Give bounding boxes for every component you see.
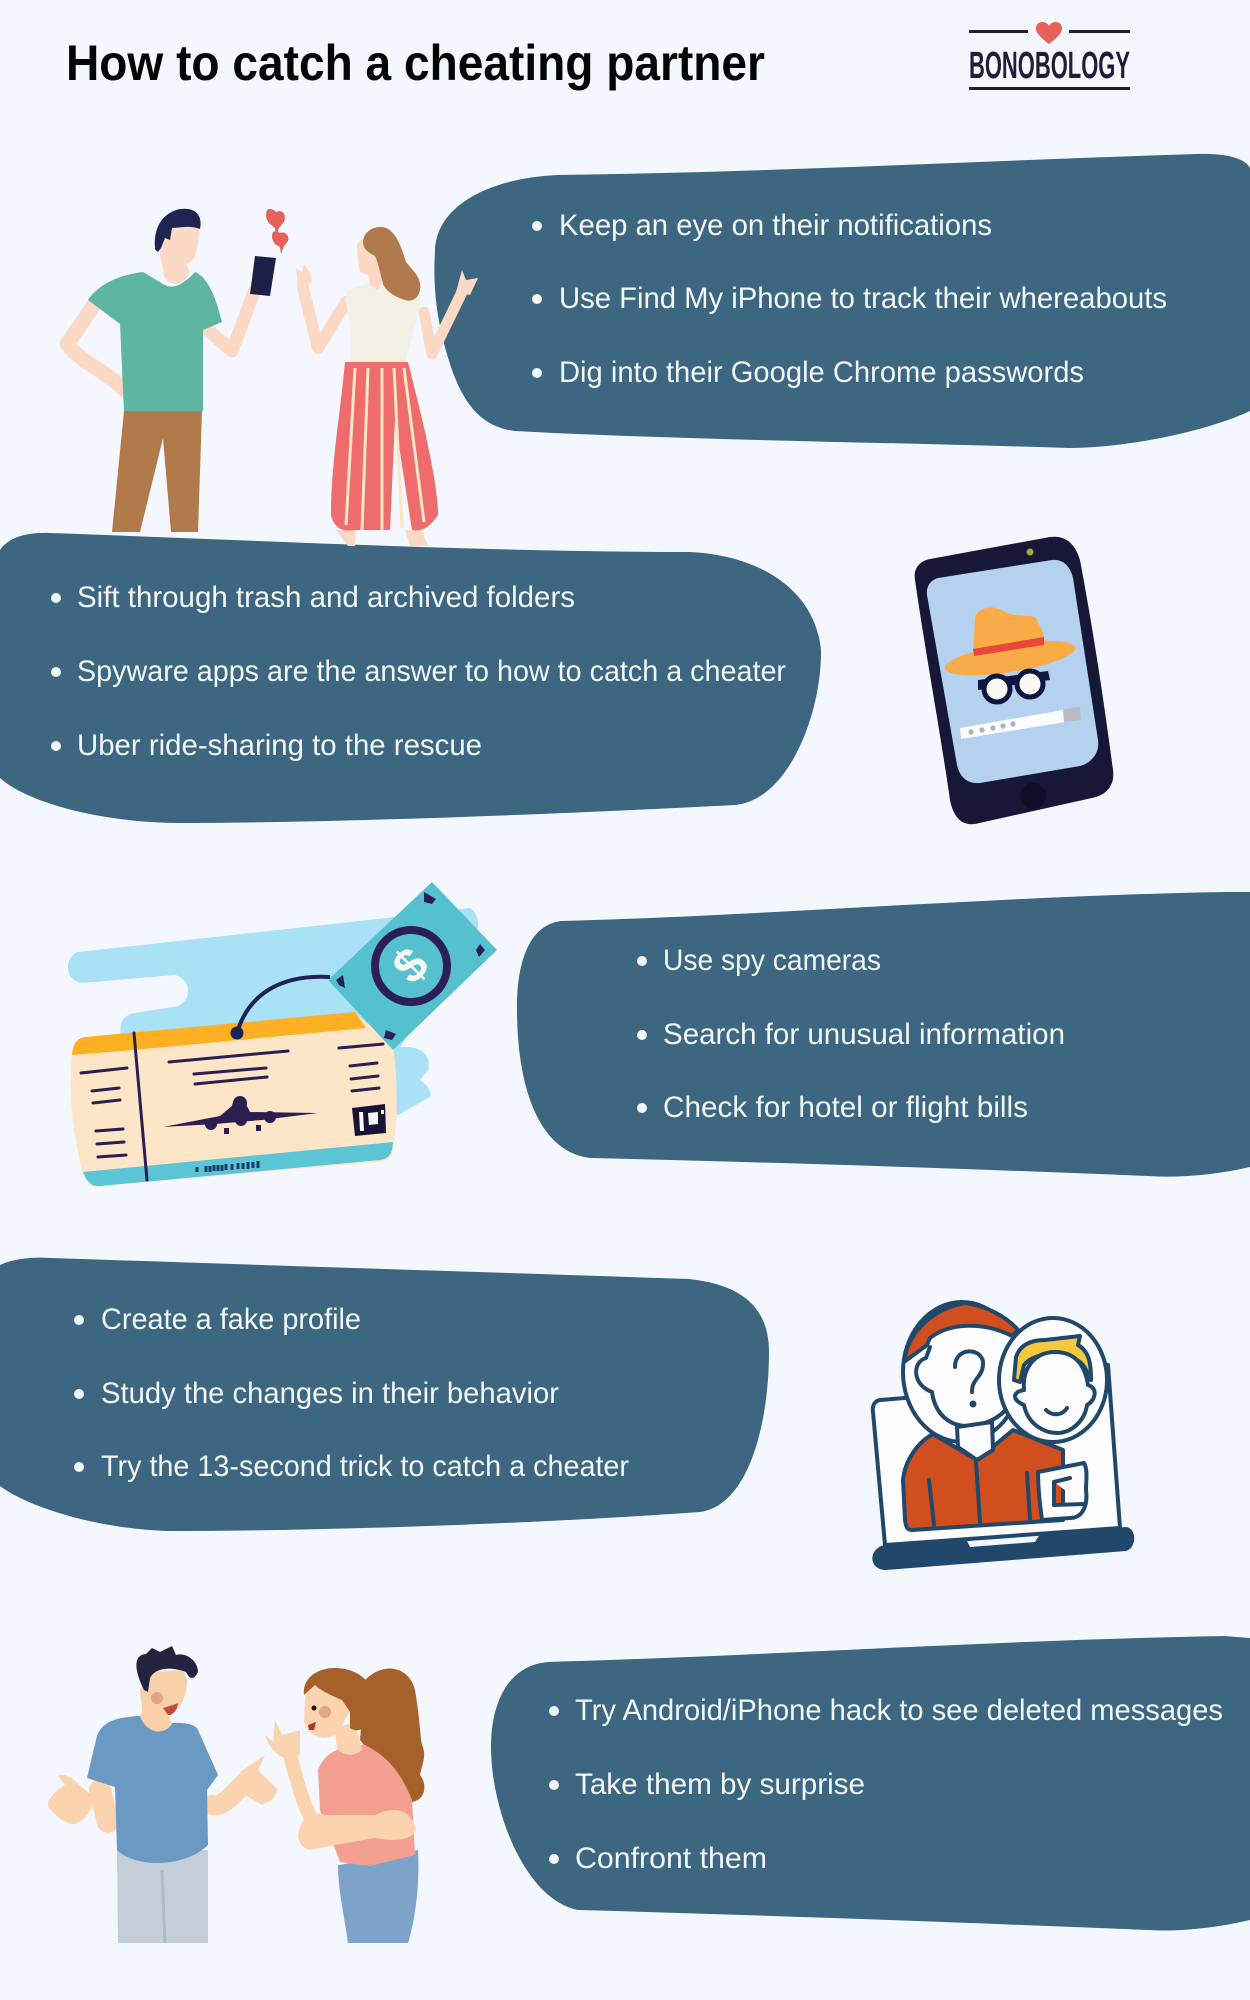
- woman gesturing: [296, 227, 478, 546]
- panel: surprise and confront tips: [491, 1636, 1250, 1931]
- banknote: [328, 882, 497, 1050]
- panel: notifications tips: Dig into their Google Chrome passwords: [559, 356, 1084, 389]
- ticket body: [70, 1013, 397, 1186]
- panel: fake profile tips: Create a fake profile: [101, 1303, 361, 1336]
- panel: notifications tips: Use Find My iPhone to track their whereabouts: [559, 282, 1167, 315]
- panel: trash and spyware tips: Spyware apps are the answer to how to catch a cheater: [77, 655, 786, 688]
- illustration: phone with spy hat: [915, 537, 1113, 824]
- barcode: [197, 1161, 258, 1172]
- panel: surprise and confront tips: Confront them: [575, 1842, 767, 1875]
- logo: Bonobology: BONOBOLOGY: [969, 45, 1130, 87]
- cloud shape: [68, 908, 478, 1115]
- panel: notifications tips: [434, 154, 1250, 448]
- hidden face with question mark: [903, 1302, 1021, 1442]
- panel: spy camera tips: Use spy cameras: [663, 944, 881, 977]
- phone screen: [927, 560, 1098, 783]
- panel: spy camera tips: Check for hotel or flight bills: [663, 1091, 1028, 1124]
- connecting string: [237, 977, 330, 1033]
- illustration: flight ticket and money: $: [383, 938, 439, 994]
- QR code: [352, 1104, 386, 1136]
- illustration: arguing couple: [48, 1646, 424, 1943]
- person body: [903, 1430, 1063, 1530]
- panel: fake profile tips: Study the changes in their behavior: [101, 1377, 559, 1410]
- phone body: [915, 537, 1113, 824]
- ticket teal band: [83, 1142, 393, 1186]
- glasses: [978, 671, 1050, 702]
- arguing woman: [265, 1668, 424, 1943]
- panel: spy camera tips: [517, 892, 1250, 1177]
- panel: notifications tips: Keep an eye on their notifications: [559, 209, 992, 242]
- spy hat: [943, 608, 1077, 682]
- smiling mask: [999, 1318, 1107, 1442]
- logo: Bonobology: [969, 22, 1130, 90]
- panel: surprise and confront tips: Try Android/iPhone hack to see deleted messages: [575, 1694, 1223, 1727]
- hand holding mask: [1038, 1463, 1086, 1520]
- laptop screen: [873, 1365, 1120, 1545]
- panel: fake profile tips: [0, 1258, 769, 1531]
- man with phone: [67, 209, 288, 532]
- illustration: couple with phone: [67, 209, 478, 546]
- panel: spy camera tips: Search for unusual information: [663, 1018, 1065, 1051]
- password field: [960, 707, 1081, 739]
- laptop base: [872, 1527, 1134, 1570]
- ticket details: [81, 1033, 383, 1180]
- title: How to catch a cheating partner: [66, 35, 765, 91]
- illustration: flight ticket and money: [68, 882, 497, 1186]
- panel: trash and spyware tips: Sift through trash and archived folders: [77, 581, 575, 614]
- panel: trash and spyware tips: [0, 533, 821, 823]
- ticket orange band: [72, 1012, 366, 1055]
- panel: fake profile tips: Try the 13-second trick to catch a cheater: [101, 1450, 629, 1483]
- airplane: [163, 1096, 318, 1134]
- panel: surprise and confront tips: Take them by surprise: [575, 1768, 865, 1801]
- illustration: fake profile on laptop: [872, 1302, 1134, 1570]
- panel: trash and spyware tips: Uber ride-sharing to the rescue: [77, 729, 482, 762]
- arguing man: [48, 1646, 278, 1943]
